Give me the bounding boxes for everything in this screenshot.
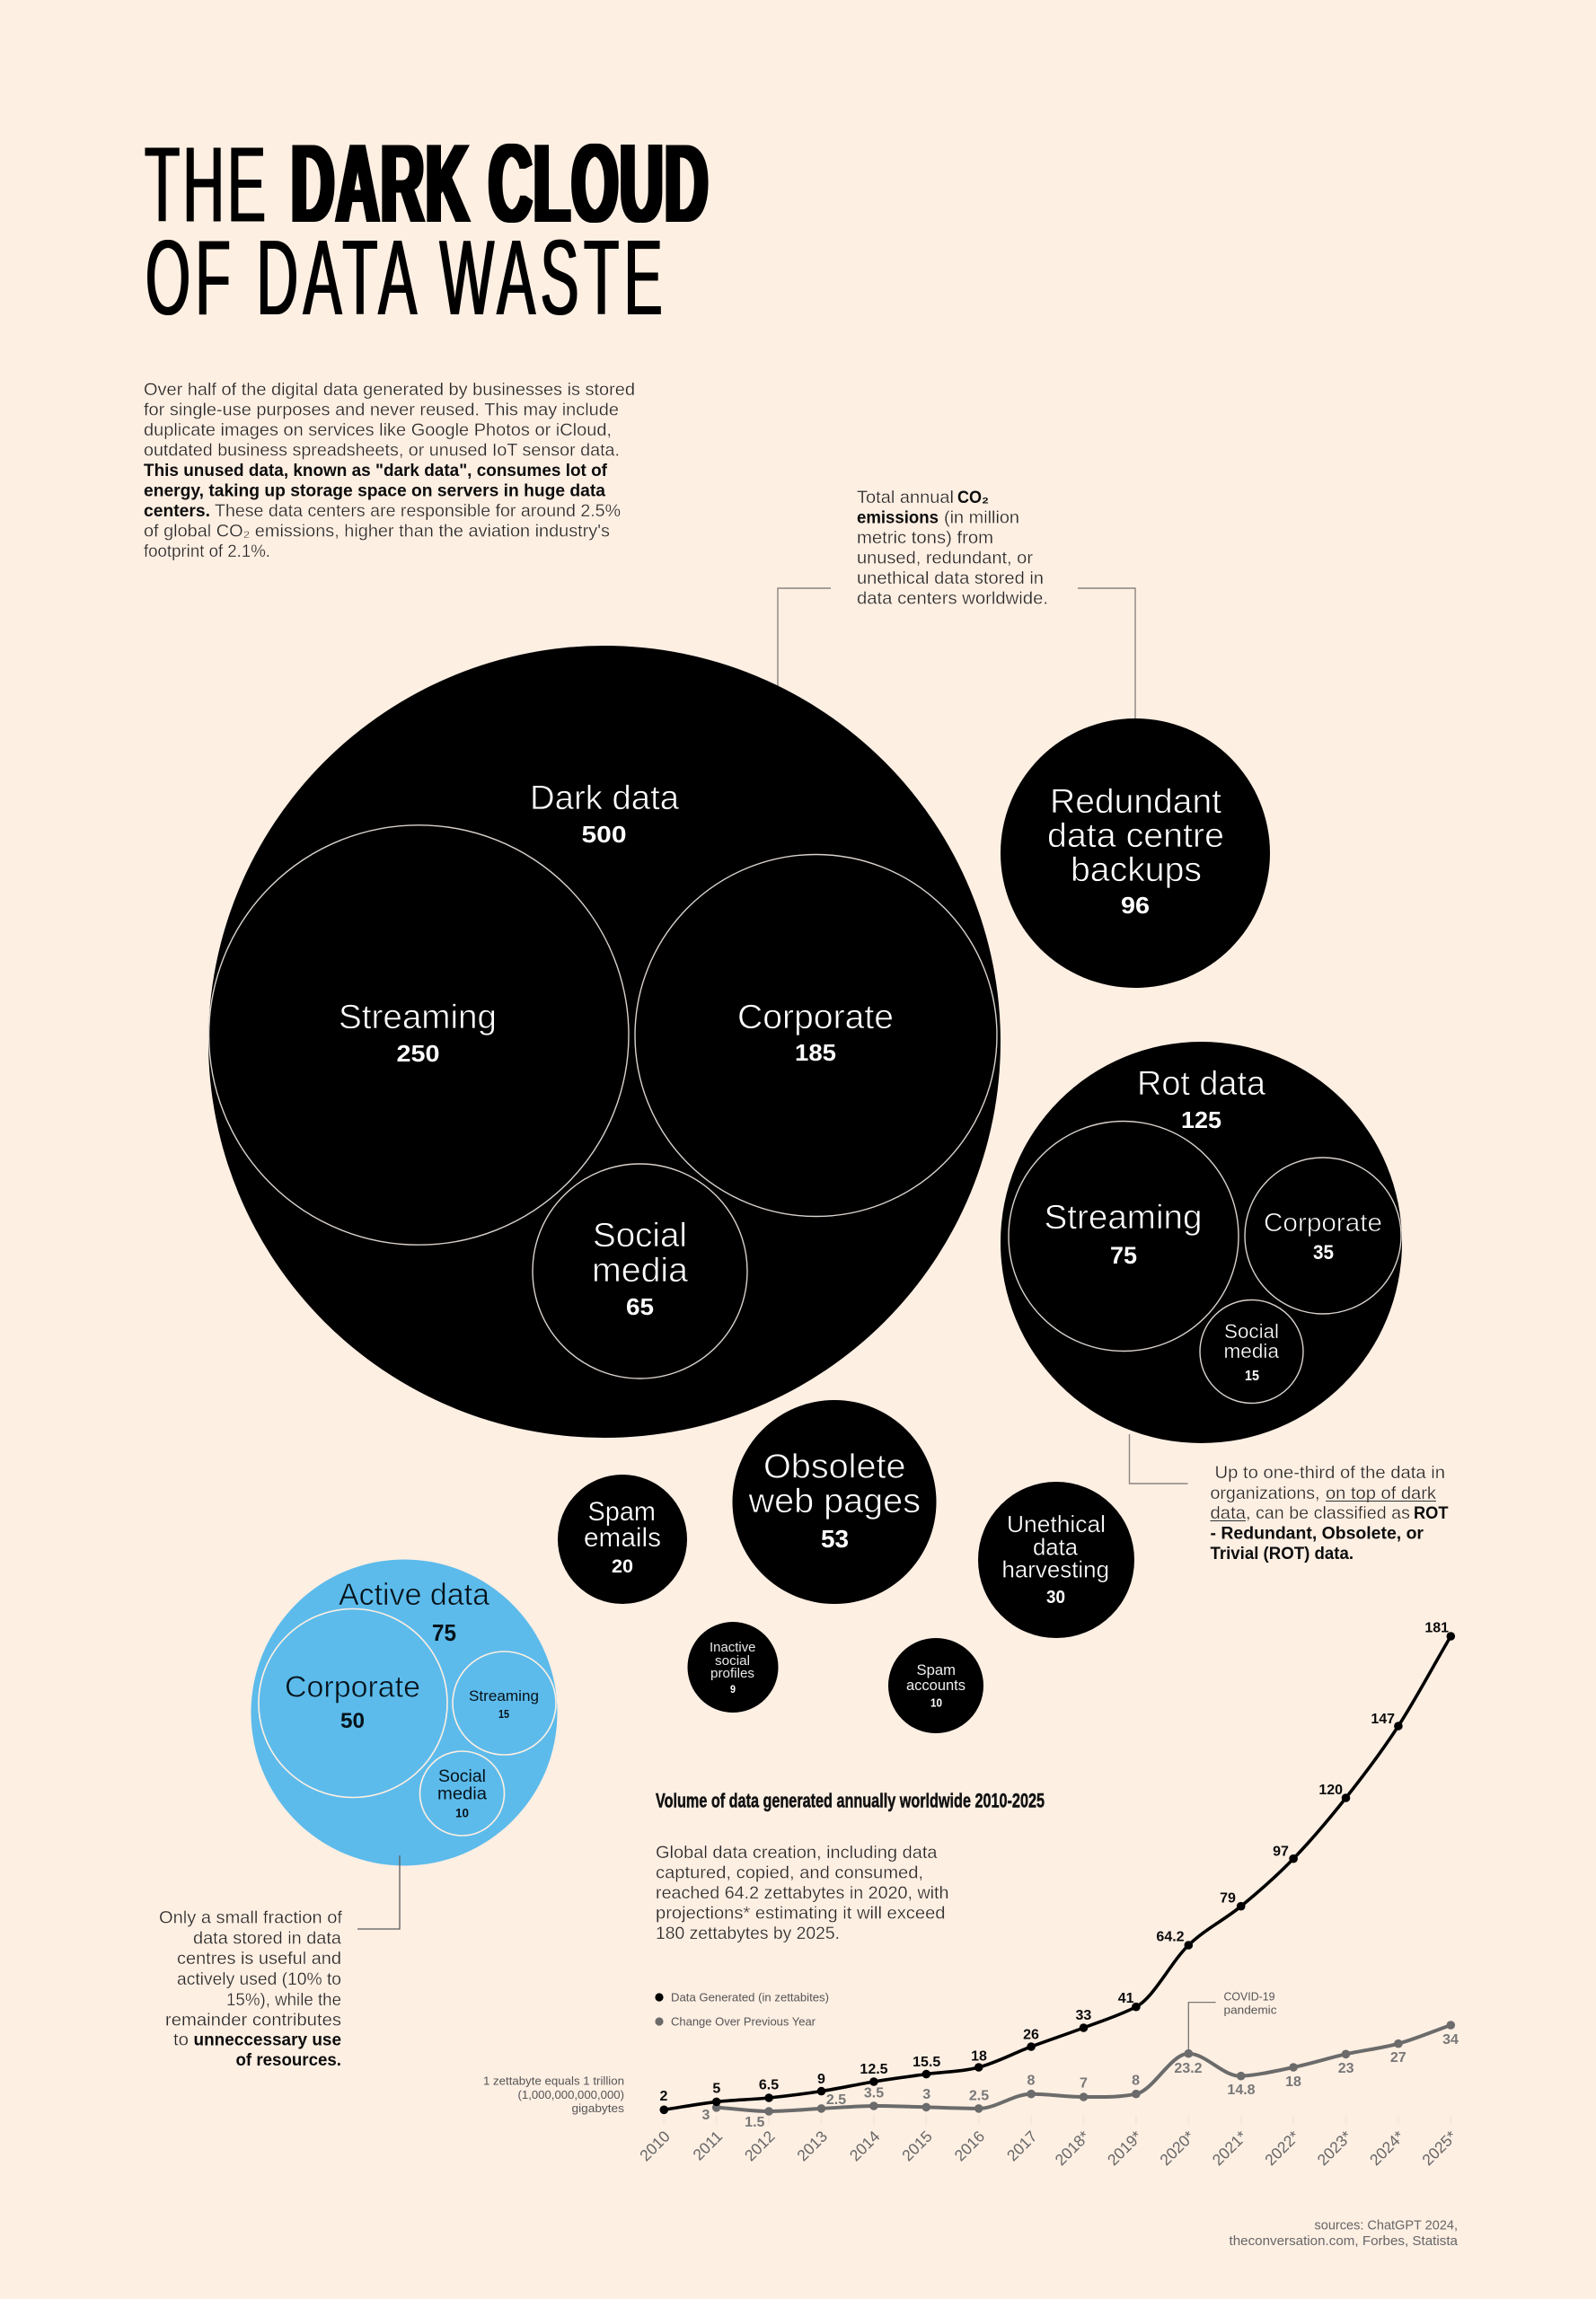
unit note: gigabytes (571, 2101, 625, 2115)
x axis year labels: 2013 (793, 2127, 831, 2164)
axis tick marks (664, 2116, 1451, 2124)
x axis year labels: 2014 (846, 2127, 884, 2164)
bubble: inactive social profiles 9 (688, 1622, 778, 1713)
bubble: spam accounts 10 (888, 1638, 983, 1733)
panel: redundant backups bubble: Redundant (1050, 783, 1221, 821)
x axis year labels: 2024* (1366, 2127, 1408, 2169)
panel: redundant backups bubble (1001, 718, 1270, 988)
sub-bubble: streaming 250 (209, 825, 629, 1245)
bubble: spam accounts 10: accounts (906, 1677, 966, 1694)
arrow: rot data to note (1130, 1434, 1187, 1484)
sub-bubble: social media 10 (420, 1751, 505, 1836)
black line value labels: 9 (817, 2072, 825, 2087)
intro text block: outdated business spreadsheets, or unused IoT sensor data. (144, 442, 620, 460)
gray line value labels: 23 (1338, 2061, 1354, 2076)
callout: total annual CO2 emissions: unused, redundant, or (857, 550, 1034, 568)
chart description text: Global data creation, including data (656, 1844, 938, 1863)
callout: total annual CO2 emissions: unethical data stored in (857, 569, 1044, 588)
chart description text: reached 64.2 zettabytes in 2020, with (656, 1884, 948, 1903)
heading: active data label (339, 1578, 489, 1646)
sub-bubble: corporate 35 (1245, 1158, 1401, 1314)
sub-bubble: social media 10: 10 (455, 1805, 469, 1819)
black line value labels (660, 1620, 1449, 2104)
arrow: CO2 callout to redundant backups (1078, 588, 1135, 719)
unit note (483, 2074, 625, 2115)
x axis year labels: 2025* (1418, 2127, 1460, 2169)
chart description text: captured, copied, and consumed, (656, 1864, 923, 1882)
intro text block: footprint of 2.1%. (144, 542, 270, 561)
black line value labels: 2 (660, 2089, 668, 2104)
sub-bubble: streaming 250: Streaming (339, 999, 497, 1036)
bubble: obsolete web pages 53: Obsolete (763, 1448, 905, 1485)
intro text block: of global CO₂ emissions, higher than the aviation industry's (144, 523, 610, 541)
chart legend (655, 1990, 829, 2028)
bubble: inactive social profiles 9: Inactive (710, 1640, 756, 1655)
intro text block: centers. (144, 502, 210, 521)
bubble: inactive social profiles 9: profiles (710, 1666, 754, 1681)
bubble: spam emails 20: Spam (587, 1497, 656, 1527)
sub-bubble: streaming 15 (453, 1652, 556, 1755)
sub-bubble: social media 15: Social (1224, 1320, 1279, 1343)
sub-bubble: social media 15: media (1223, 1340, 1280, 1362)
black line value labels: 5 (712, 2082, 720, 2096)
sub-bubble: streaming 75: Streaming (1044, 1199, 1202, 1237)
x axis year labels: 2015 (898, 2127, 936, 2164)
title: OF DATA WASTE (145, 218, 663, 338)
line chart: data generated and yearly change (636, 1620, 1460, 2169)
bubble: unethical data harvesting 30: Unethical (1007, 1511, 1106, 1537)
unit note: (1,000,000,000,000) (517, 2088, 624, 2101)
intro text block: Over half of the digital data generated by businesses is stored (144, 381, 635, 400)
callout: total annual CO2 emissions: (in million (944, 508, 1019, 528)
black line value labels: 26 (1023, 2028, 1039, 2042)
sub-bubble: social media 65: media (592, 1252, 689, 1290)
black line value labels: 97 (1273, 1845, 1289, 1859)
arrow: CO2 callout to dark data (778, 588, 831, 687)
sub-bubble: corporate 185 (635, 855, 997, 1216)
intro text block: duplicate images on services like Google Photos or iCloud, (144, 421, 612, 440)
sub-bubble: corporate 50: 50 (340, 1709, 365, 1733)
gray line value labels: 8 (1132, 2073, 1140, 2089)
callout: total annual CO2 emissions: metric tons) from (857, 529, 993, 548)
gray line value labels (702, 2032, 1459, 2130)
callout: active data note (159, 1909, 343, 2070)
bubble: spam emails 20 (558, 1475, 687, 1604)
callout: active data note: actively used (10% to (177, 1970, 341, 1989)
bubble: unethical data harvesting 30: data (1033, 1534, 1079, 1561)
x axis year labels: 2018* (1052, 2127, 1093, 2169)
callout: active data note: centres is useful and (177, 1950, 341, 1969)
gray line value labels: 27 (1390, 2050, 1406, 2066)
arrow: active data to note (357, 1855, 400, 1929)
black line value labels: 147 (1371, 1712, 1395, 1727)
sub-bubble: streaming 15: Streaming (469, 1687, 539, 1704)
callout: total annual CO2 emissions: CO₂ (957, 489, 989, 507)
sub-bubble: social media 15 (1200, 1300, 1303, 1403)
x axis year labels: 2017 (1003, 2127, 1041, 2164)
callout: rot data note: Up to one-third of the data in (1214, 1464, 1445, 1483)
sub-bubble: social media 10: media (437, 1785, 487, 1803)
title (145, 122, 708, 338)
gray line value labels: 2.5 (969, 2089, 989, 2103)
gray line value labels: 34 (1442, 2032, 1459, 2048)
chart legend: Change Over Previous Year (671, 2015, 816, 2028)
title: THE (145, 125, 266, 245)
callout: rot data note: data (1211, 1504, 1246, 1523)
black line value labels: 12.5 (860, 2062, 888, 2077)
sub-bubble: corporate 185: Corporate (737, 999, 894, 1036)
callout: rot data note: organizations, (1211, 1484, 1320, 1503)
gray line: change over previous year (712, 2021, 1455, 2116)
x axis year labels: 2020* (1156, 2127, 1198, 2169)
sub-bubble: corporate 35: 35 (1313, 1241, 1334, 1264)
COVID annotation: pandemic (1223, 2003, 1277, 2017)
callout: active data note: data stored in data (193, 1929, 341, 1949)
bubble: unethical data harvesting 30: 30 (1046, 1588, 1065, 1608)
sources: theconversation.com, Forbes, Statista (1229, 2233, 1459, 2249)
panel: redundant backups bubble: 96 (1121, 892, 1150, 919)
intro text block: These data centers are responsible for around 2.5% (215, 502, 621, 521)
heading: rot data label: 125 (1181, 1106, 1221, 1133)
black line value labels: 64.2 (1156, 1929, 1185, 1945)
callout: total annual CO2 emissions: emissions (857, 508, 939, 528)
bubble: spam emails 20: emails (584, 1523, 661, 1553)
sources (1229, 2218, 1459, 2249)
callout: active data note: 15%), while the (226, 1991, 341, 2010)
callout: active data note: Only a small fraction of (159, 1909, 343, 1927)
bubble: spam accounts 10: 10 (930, 1696, 942, 1710)
x axis year labels: 2019* (1104, 2127, 1146, 2169)
x axis year labels: 2011 (689, 2127, 726, 2163)
sub-bubble: corporate 35: Corporate (1264, 1209, 1382, 1238)
heading: rot data label: Rot data (1137, 1065, 1266, 1103)
panel: rot data bubble (1001, 1042, 1402, 1443)
panel: redundant backups bubble: backups (1071, 851, 1202, 889)
gray line value labels: 3 (702, 2108, 710, 2123)
x axis year labels: 2022* (1261, 2127, 1303, 2169)
panel: redundant backups bubble: data centre (1047, 817, 1224, 855)
panel: active data bubble (251, 1559, 557, 1866)
black line value labels: 41 (1118, 1991, 1134, 2006)
bubble: obsolete web pages 53 (733, 1400, 936, 1604)
chart description text (656, 1844, 948, 1943)
black line value labels: 15.5 (913, 2055, 940, 2070)
callout: active data note: of resources. (235, 2051, 341, 2070)
gray line value labels: 7 (1080, 2076, 1088, 2091)
sub-bubble: social media 65 (533, 1164, 747, 1379)
gray line value labels: 3 (922, 2087, 930, 2102)
black line value labels: 120 (1318, 1783, 1343, 1798)
black line value labels: 18 (971, 2049, 987, 2064)
sub-bubble: streaming 15: 15 (498, 1707, 509, 1721)
callout: rot data note: , can be classified as (1246, 1504, 1410, 1523)
chart description text: 180 zettabytes by 2025. (656, 1925, 840, 1943)
callout: total annual CO2 emissions: data centers worldwide. (857, 589, 1048, 609)
x axis year labels: 2021* (1209, 2127, 1250, 2169)
gray line value labels: 2.5 (826, 2092, 846, 2108)
COVID annotation: COVID-19 (1223, 1990, 1275, 2003)
callout: active data note: unneccessary use (194, 2031, 341, 2049)
x axis year labels: 2012 (741, 2127, 779, 2164)
sub-bubble: corporate 50: Corporate (285, 1670, 420, 1703)
heading: dark data label: Dark data (530, 780, 680, 817)
callout: active data note: remainder contributes (165, 2012, 341, 2030)
sub-bubble: corporate 50 (259, 1609, 447, 1798)
x axis year labels: 2023* (1314, 2127, 1355, 2169)
black line value labels: 181 (1424, 1620, 1449, 1636)
black line value labels: 33 (1076, 2008, 1091, 2023)
bubble: spam accounts 10: Spam (916, 1661, 956, 1678)
sub-bubble: streaming 75 (1009, 1121, 1239, 1351)
bubble: inactive social profiles 9: social (715, 1653, 750, 1669)
callout: active data note: to (173, 2031, 189, 2049)
intro text block: energy, taking up storage space on servers in huge data (144, 481, 605, 501)
callout: total annual CO2 emissions (857, 489, 1048, 609)
intro text block: This unused data, known as "dark data", consumes lot of (144, 462, 608, 480)
intro text block: for single-use purposes and never reused. This may include (144, 401, 619, 420)
callout: total annual CO2 emissions: Total annual (857, 489, 954, 507)
heading: active data label: Active data (339, 1578, 489, 1612)
heading: rot data label (1137, 1065, 1266, 1133)
intro text block (144, 381, 635, 561)
callout: rot data note: ROT (1414, 1504, 1449, 1523)
bubble: unethical data harvesting 30 (978, 1482, 1134, 1638)
heading: active data label: 75 (432, 1619, 456, 1646)
sub-bubble: social media 15: 15 (1245, 1369, 1259, 1384)
COVID annotation (1223, 1990, 1277, 2017)
sub-bubble: social media 65: Social (593, 1217, 687, 1255)
gray line value labels: 23.2 (1174, 2061, 1203, 2076)
gray line value labels: 3.5 (864, 2085, 884, 2101)
sub-bubble: streaming 75: 75 (1110, 1242, 1137, 1269)
COVID annotation leader (1188, 2003, 1216, 2054)
panel: dark data bubble (208, 646, 1001, 1438)
bubble: obsolete web pages 53: 53 (821, 1525, 849, 1553)
callout: rot data note: on top of dark (1326, 1484, 1437, 1503)
chart description text: projections* estimating it will exceed (656, 1904, 945, 1924)
gray line value labels: 14.8 (1227, 2083, 1256, 2098)
bubble: obsolete web pages 53: web pages (747, 1483, 921, 1520)
sources: sources: ChatGPT 2024, (1315, 2218, 1458, 2233)
chart title: Volume of data generated annually worldwide 2010-2025 (656, 1789, 1045, 1812)
x axis year labels: 2010 (636, 2127, 674, 2164)
bubble: unethical data harvesting 30: harvesting (1002, 1555, 1109, 1582)
title: DARK CLOUD (291, 122, 708, 246)
callout: rot data note: - Redundant, Obsolete, or (1211, 1525, 1424, 1543)
x axis year labels: 2016 (951, 2127, 988, 2164)
heading: dark data label: 500 (582, 821, 627, 848)
sub-bubble: corporate 185: 185 (795, 1039, 836, 1066)
black line: data generated (659, 1632, 1455, 2114)
sub-bubble: social media 65: 65 (626, 1293, 654, 1320)
black line value labels: 79 (1220, 1891, 1236, 1906)
sub-bubble: streaming 250: 250 (397, 1040, 440, 1067)
callout: rot data note: Trivial (ROT) data. (1211, 1545, 1354, 1563)
black line value labels: 6.5 (759, 2078, 779, 2092)
unit note: 1 zettabyte equals 1 trillion (483, 2074, 624, 2087)
heading: dark data label (530, 780, 680, 848)
gray line value labels: 18 (1285, 2074, 1301, 2090)
gray line value labels: 8 (1027, 2073, 1036, 2089)
x axis year labels (636, 2127, 1460, 2169)
gray line value labels: 1.5 (745, 2115, 765, 2130)
chart legend: Data Generated (in zettabites) (671, 1990, 829, 2004)
callout: rot data note (1211, 1464, 1449, 1563)
bubble: inactive social profiles 9: 9 (730, 1683, 736, 1696)
bubble: spam emails 20: 20 (612, 1556, 633, 1577)
sub-bubble: social media 10: Social (438, 1767, 486, 1786)
